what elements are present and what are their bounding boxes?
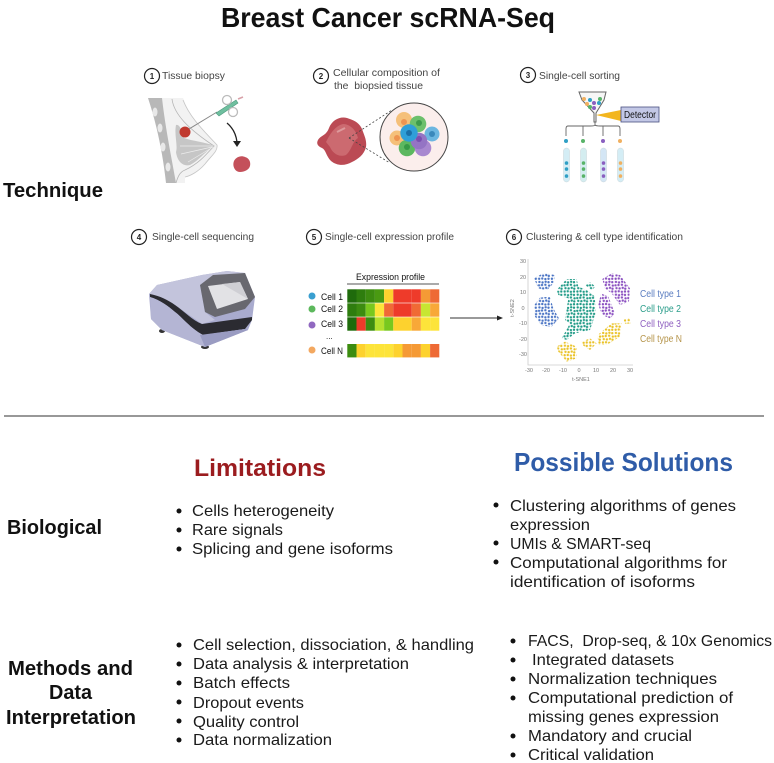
cluster: cell type N	[557, 318, 630, 362]
scatter plot: 30	[627, 368, 633, 374]
scatter plot: t-SNE2	[510, 299, 516, 317]
step 2: cellular composition: Cellular composition of	[333, 67, 440, 79]
step 2: cellular composition: 2	[319, 72, 324, 81]
list: methods solutions: Mandatory and crucial	[528, 728, 692, 745]
list: methods limitations: Cell selection, dissociation, & handling	[193, 637, 474, 654]
step 1: tissue biopsy	[144, 68, 250, 183]
title: Breast Cancer scRNA-Seq	[221, 2, 555, 33]
list: biological solutions: Clustering algorithms of genes	[510, 498, 736, 515]
list: methods solutions	[510, 633, 772, 763]
icon: funnel and tubes	[564, 92, 624, 182]
scatter plot: 0	[577, 368, 581, 374]
step 4: single-cell sequencing: Single-cell sequencing	[152, 231, 254, 243]
step 1: tissue biopsy: Tissue biopsy	[162, 70, 226, 82]
cluster: cell type 3	[598, 273, 630, 318]
cluster: cell type 2	[557, 279, 596, 340]
list: methods solutions: Normalization techniques	[528, 671, 717, 688]
scatter plot: -30	[519, 352, 527, 358]
scatter plot: -30	[525, 368, 533, 374]
list: biological limitations: Splicing and gene isoforms	[192, 541, 393, 558]
icon: breast cross-section with biopsy	[148, 96, 250, 183]
list: biological limitations	[176, 503, 393, 558]
heatmap	[347, 289, 439, 357]
scatter plot: t-SNE1	[572, 377, 590, 383]
cell labels: Cell 1	[321, 292, 343, 302]
scatter plot: -10	[559, 368, 567, 374]
scatter plot: 10	[520, 290, 526, 296]
step 6: clustering and cell type identification: 6	[512, 233, 517, 242]
row heading: methods and data interpretation	[6, 658, 136, 729]
step 5: single-cell expression profile: Expression profile	[356, 272, 425, 283]
scatter plot: -20	[542, 368, 550, 374]
step 5: single-cell expression profile: Single-cell expression profile	[325, 231, 454, 243]
step 4: single-cell sequencing: 4	[137, 233, 142, 242]
row heading: biological: Biological	[7, 517, 102, 539]
row heading: methods and data interpretation: Methods and	[8, 658, 133, 680]
step 3: single-cell sorting: Single-cell sorting	[539, 70, 620, 82]
icon: magnified cell cluster	[380, 103, 448, 171]
list: biological solutions: identification of isoforms	[510, 574, 695, 591]
scatter plot: 20	[520, 275, 526, 281]
scatter plot: 10	[593, 368, 599, 374]
step 6: clustering and cell type identification: Clustering & cell type identification	[526, 231, 683, 243]
legend	[640, 289, 682, 345]
list: methods solutions: Computational prediction of	[528, 690, 734, 707]
scatter clusters	[534, 273, 630, 362]
list: biological solutions: UMIs & SMART-seq	[510, 536, 651, 553]
scatter plot	[510, 259, 682, 383]
list: methods limitations: Data normalization	[193, 732, 332, 749]
list: biological solutions	[494, 498, 736, 591]
cell labels: Cell 2	[321, 304, 343, 314]
scatter plot: 20	[610, 368, 616, 374]
list: biological limitations: Rare signals	[192, 522, 283, 539]
heading: limitations: Limitations	[194, 455, 326, 482]
list: methods limitations: Batch effects	[193, 675, 290, 692]
list: methods solutions: FACS, Drop-seq, & 10x Genomics	[528, 633, 772, 650]
arrow: profile to clustering	[450, 316, 503, 320]
list: biological limitations: Cells heterogeneity	[192, 503, 334, 520]
row heading: methods and data interpretation: Interpretation	[6, 707, 136, 729]
list: methods limitations: Dropout events	[193, 695, 304, 712]
step 2: cellular composition	[314, 67, 448, 171]
legend: Cell type 2	[640, 304, 681, 315]
list: methods limitations: Data analysis & interpretation	[193, 656, 409, 673]
list: methods limitations	[176, 637, 474, 749]
heading: possible solutions: Possible Solutions	[514, 447, 733, 477]
list: biological solutions: expression	[510, 517, 590, 534]
cluster: cell type 1	[534, 273, 559, 327]
row heading: methods and data interpretation: Data	[49, 682, 93, 704]
scatter plot: 30	[520, 259, 526, 265]
scatter plot: 0	[521, 306, 525, 312]
scatter plot: -10	[519, 321, 527, 327]
icon: tumour mass	[317, 117, 366, 165]
detector label: Detector	[624, 110, 657, 121]
icon: sequencer machine	[149, 271, 255, 349]
cell labels: Cell N	[321, 346, 343, 356]
step 3: single-cell sorting	[520, 68, 659, 182]
list: methods solutions: Integrated datasets	[532, 652, 674, 669]
step 5: single-cell expression profile: 5	[312, 233, 317, 242]
step 3: single-cell sorting: 3	[526, 71, 531, 80]
step 4: single-cell sequencing	[132, 230, 255, 349]
cell labels: Cell 3	[321, 319, 343, 329]
list: biological solutions: Computational algorithms for	[510, 555, 728, 572]
step 1: tissue biopsy: 1	[150, 72, 155, 81]
heading: technique: Technique	[3, 180, 103, 202]
list: methods solutions: missing genes expression	[528, 709, 719, 726]
step 6: clustering and cell type identification	[506, 230, 683, 383]
legend: Cell type N	[640, 334, 682, 345]
cell labels	[308, 292, 343, 356]
list: methods limitations: Quality control	[193, 714, 299, 731]
legend: Cell type 3	[640, 319, 681, 330]
step 5: single-cell expression profile	[306, 230, 454, 357]
legend: Cell type 1	[640, 289, 681, 300]
cell labels: ...	[326, 332, 333, 341]
scatter plot: -20	[519, 337, 527, 343]
step 2: cellular composition: the biopsied tissue	[334, 80, 423, 92]
